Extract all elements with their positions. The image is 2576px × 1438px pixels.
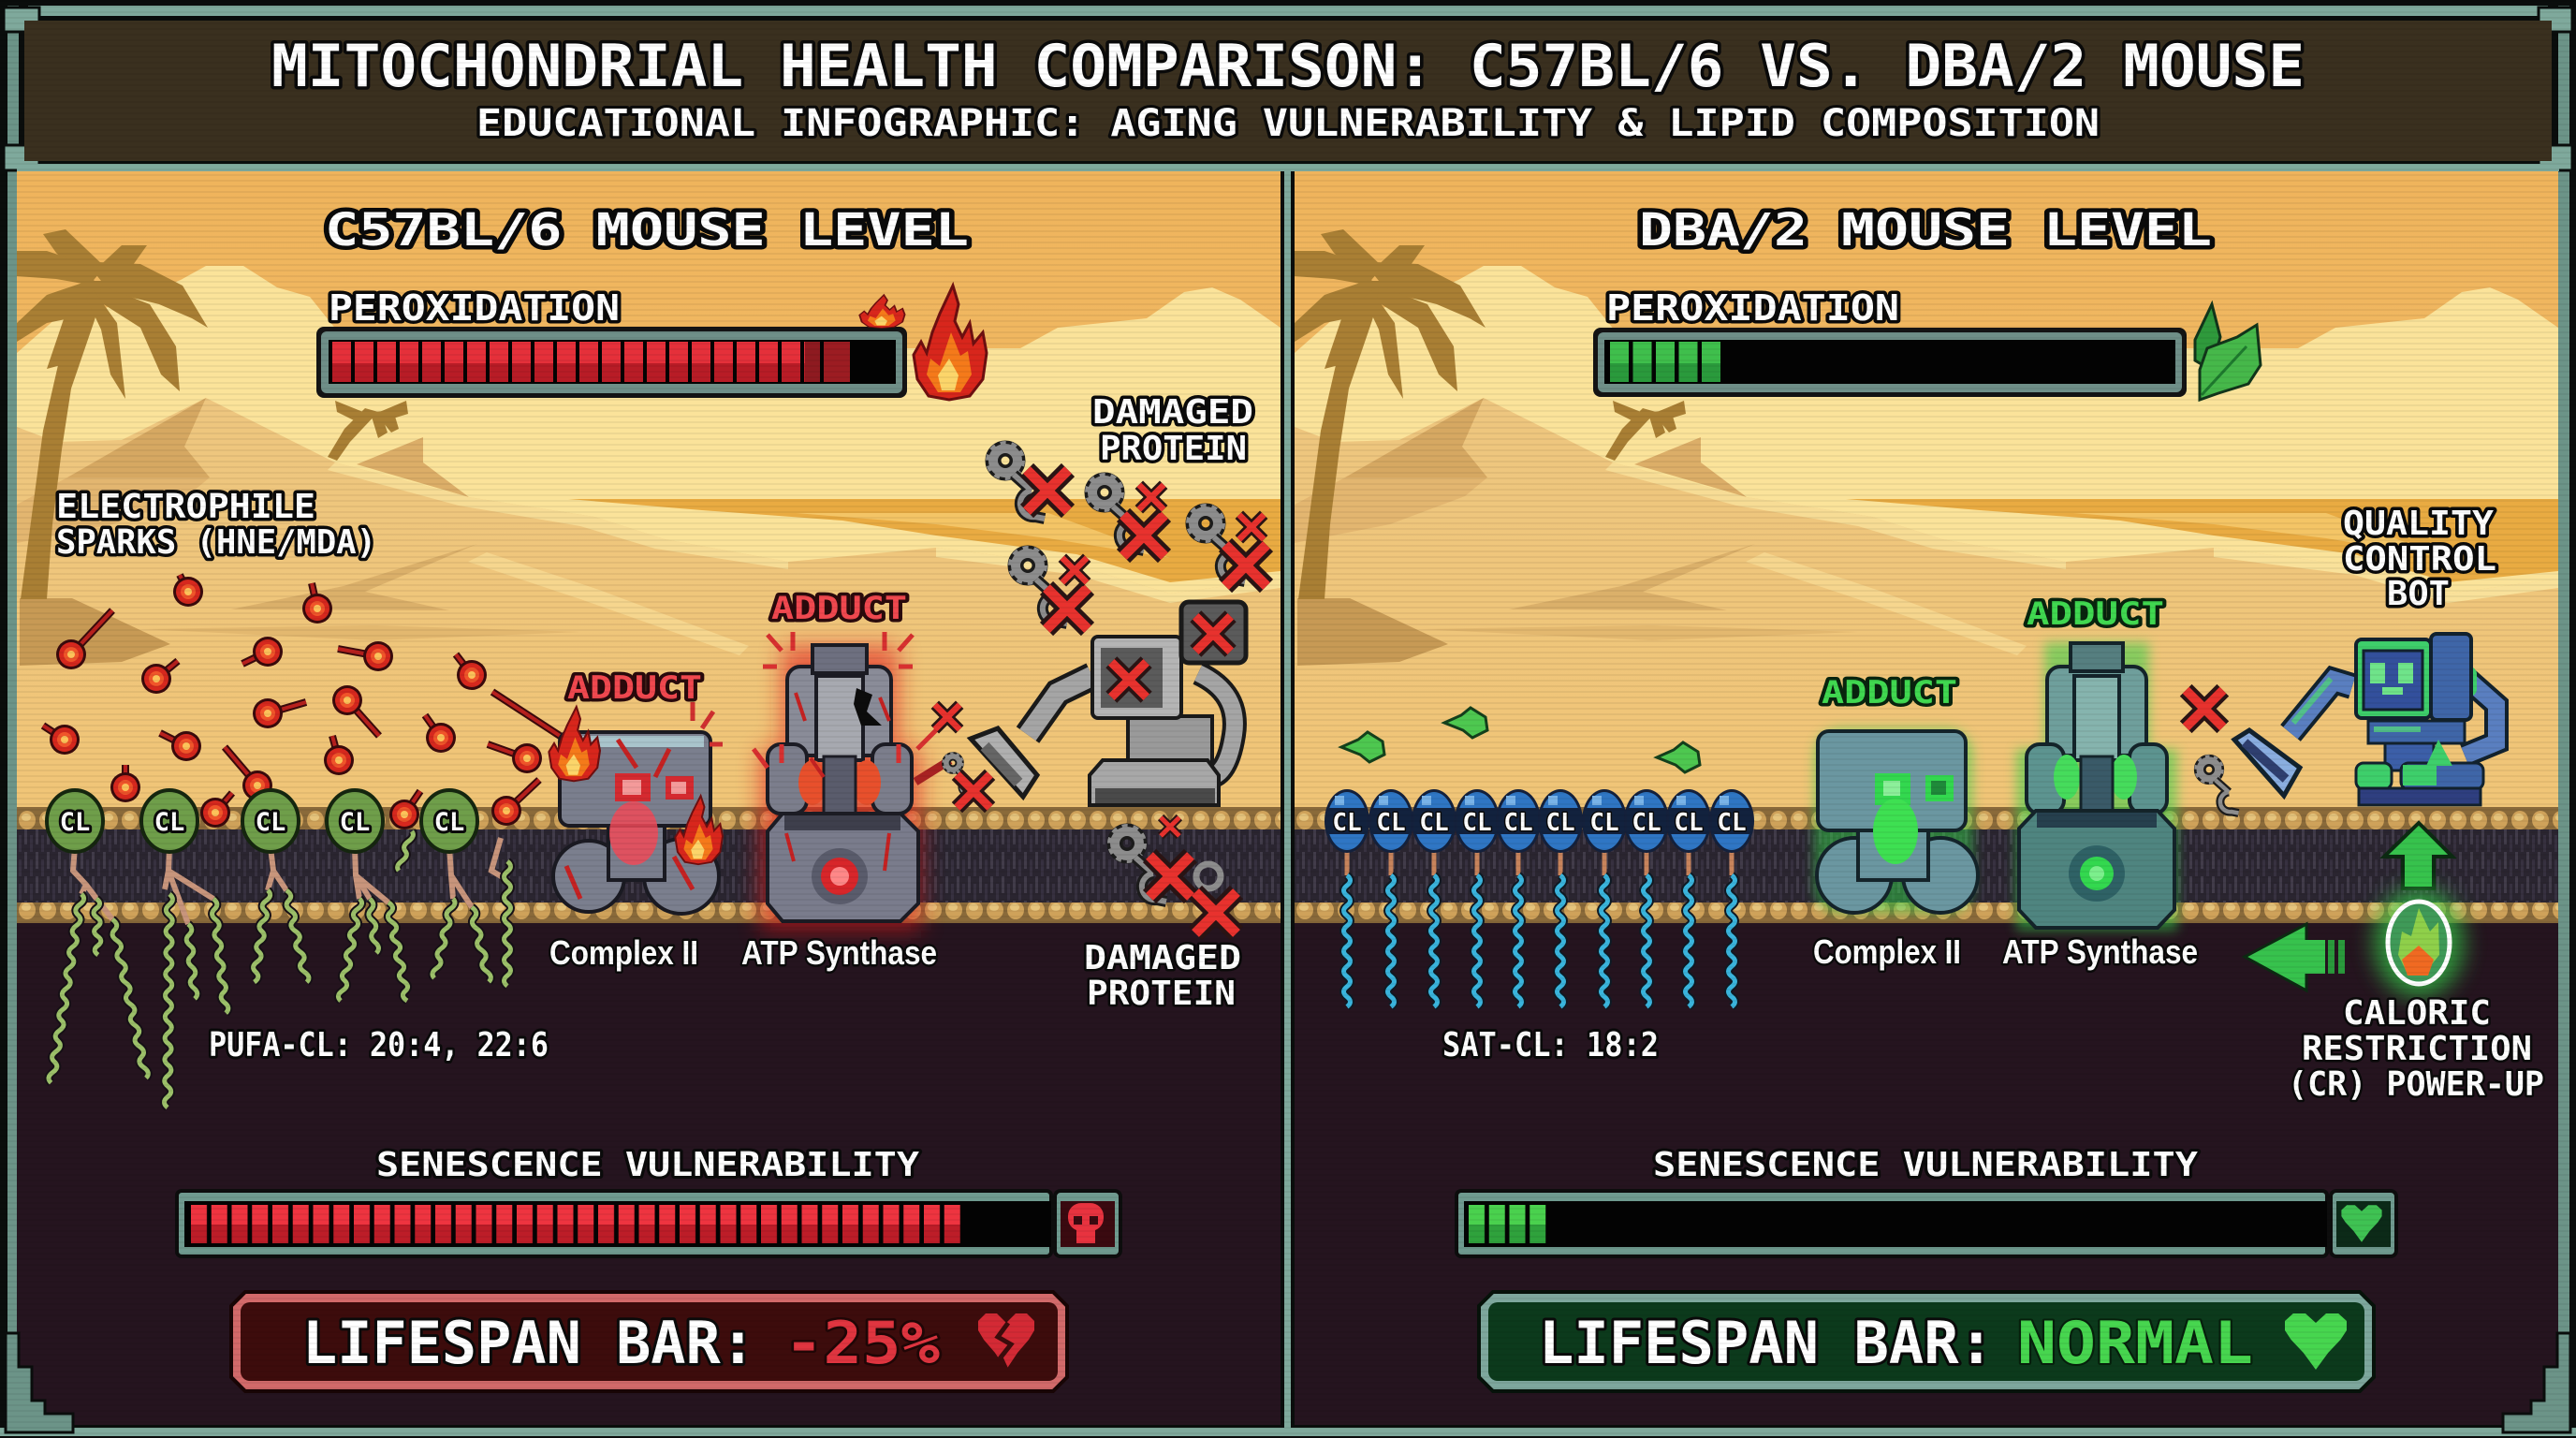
saturated cardiolipin heads: CL [1717, 809, 1747, 837]
Complex II damaged [549, 702, 723, 914]
adduct label ATP left: ADDUCT [771, 590, 907, 627]
icon: skull [1055, 1191, 1120, 1256]
saturated cardiolipin heads: CL [1462, 809, 1492, 837]
label: caloric restriction: (CR) POWER-UP [2288, 1065, 2544, 1104]
quality control bot [2234, 634, 2496, 805]
saturated cardiolipin heads: CL [1376, 809, 1406, 837]
arrow: up [2384, 823, 2452, 888]
panel: C57BL/6 mouse level [17, 171, 1281, 1425]
Complex II healthy [1814, 728, 1978, 914]
lifespan bar right: NORMAL [2017, 1309, 2253, 1377]
label: electrophile sparks: ELECTROPHILE [56, 488, 315, 526]
icon: flames [859, 286, 987, 400]
PUFA cardiolipin heads: CL [60, 808, 90, 837]
PUFA cardiolipin tails [49, 831, 511, 1108]
lifespan bar right: LIFESPAN BAR: [1539, 1309, 1994, 1377]
label: ATP Synthase right: ATP Synthase [2002, 932, 2198, 971]
PUFA cardiolipin heads [47, 790, 477, 852]
ATP Synthase healthy [2016, 642, 2177, 931]
label: PUFA-CL: PUFA-CL: 20:4, 22:6 [209, 1026, 549, 1064]
label: senescence right: SENESCENCE VULNERABILITY [1653, 1146, 2198, 1184]
saturated cardiolipin heads: CL [1632, 809, 1661, 837]
title banner [24, 21, 2552, 161]
label: peroxidation right: PEROXIDATION [1606, 287, 1899, 329]
electrophile sparks [43, 575, 573, 829]
heading: C57BL/6: C57BL/6 MOUSE LEVEL [325, 204, 969, 257]
label: damaged protein top: DAMAGED [1092, 393, 1253, 432]
label: SAT-CL: SAT-CL: 18:2 [1442, 1026, 1659, 1064]
ATP Synthase damaged [754, 632, 936, 931]
label: damaged protein bottom [1084, 939, 1241, 1013]
lifespan bar left: LIFESPAN BAR: [302, 1309, 755, 1377]
adduct label complex II left: ADDUCT [567, 669, 702, 707]
subtitle: EDUCATIONAL INFOGRAPHIC: AGING VULNERABILITY & LIPID COMPOSITION [476, 102, 2100, 145]
icon: green heart [2285, 1313, 2347, 1370]
damaged proteins in membrane [1109, 817, 1237, 933]
blocked protein: X and gear [2186, 690, 2239, 813]
saturated cardiolipin heads: CL [1332, 809, 1362, 837]
icon: broken heart [978, 1313, 1034, 1370]
PUFA cardiolipin heads: CL [154, 808, 184, 837]
arrow: left [2245, 924, 2345, 990]
label: quality control bot: QUALITY [2343, 505, 2494, 543]
label: quality control bot: BOT [2387, 575, 2450, 613]
lifespan bar left [231, 1292, 1067, 1391]
senescence bar right [1456, 1191, 2396, 1256]
peroxidation bar right [1593, 328, 2187, 397]
icon: green heart small [2331, 1191, 2396, 1256]
lifespan bar right [1479, 1292, 2374, 1391]
green electrophile sparks [1341, 708, 1700, 772]
broken protein near ATP Synthase [915, 705, 990, 808]
label: damaged protein top: PROTEIN [1100, 430, 1247, 468]
saturated cardiolipin heads: CL [1589, 809, 1619, 837]
label: caloric restriction [2288, 994, 2544, 1104]
title: MITOCHONDRIAL HEALTH COMPARISON: C57BL/6 VS. DBA/2 MOUSE [271, 32, 2305, 100]
adduct label ATP right: ADDUCT [2027, 595, 2164, 633]
panel: DBA/2 mouse level [1295, 171, 2558, 1425]
frame corner stairs [6, 1333, 2570, 1432]
icon: caloric restriction capsule [2374, 888, 2464, 997]
adduct label complex II right: ADDUCT [1822, 674, 1957, 712]
saturated cardiolipin heads: CL [1545, 809, 1575, 837]
saturated cardiolipin heads: CL [1419, 809, 1449, 837]
label: quality control bot [2343, 505, 2496, 613]
gray quality control bot broken [971, 602, 1246, 805]
PUFA cardiolipin heads: CL [256, 808, 285, 837]
label: damaged protein top [1092, 393, 1253, 468]
saturated cardiolipin tails [1344, 847, 1735, 1006]
senescence bar left [177, 1191, 1120, 1256]
heading: DBA/2: DBA/2 MOUSE LEVEL [1639, 204, 2212, 257]
label: damaged protein bottom: PROTEIN [1087, 975, 1236, 1013]
label: damaged protein bottom: DAMAGED [1084, 939, 1241, 977]
label: Complex II right: Complex II [1813, 932, 1961, 971]
PUFA cardiolipin heads: CL [434, 808, 464, 837]
label: Complex II left: Complex II [549, 933, 698, 972]
desert background right [1295, 171, 2558, 1425]
damaged proteins group [988, 443, 1266, 629]
label: senescence left: SENESCENCE VULNERABILITY [376, 1146, 919, 1184]
desert background left [17, 171, 1281, 1425]
label: quality control bot: CONTROL [2343, 540, 2496, 579]
PUFA cardiolipin heads: CL [340, 808, 370, 837]
label: ATP Synthase left: ATP Synthase [741, 933, 937, 972]
lifespan bar left: -25% [784, 1309, 940, 1377]
saturated cardiolipin heads [1325, 789, 1754, 853]
label: caloric restriction: RESTRICTION [2302, 1030, 2532, 1068]
label: electrophile sparks: SPARKS (HNE/MDA) [56, 523, 376, 562]
icon: leaf [2195, 304, 2261, 400]
label: peroxidation left: PEROXIDATION [329, 287, 620, 329]
saturated cardiolipin heads: CL [1674, 809, 1704, 837]
saturated cardiolipin heads: CL [1503, 809, 1533, 837]
peroxidation bar left [316, 327, 907, 398]
label: electrophile sparks [56, 488, 376, 562]
label: caloric restriction: CALORIC [2343, 994, 2491, 1033]
